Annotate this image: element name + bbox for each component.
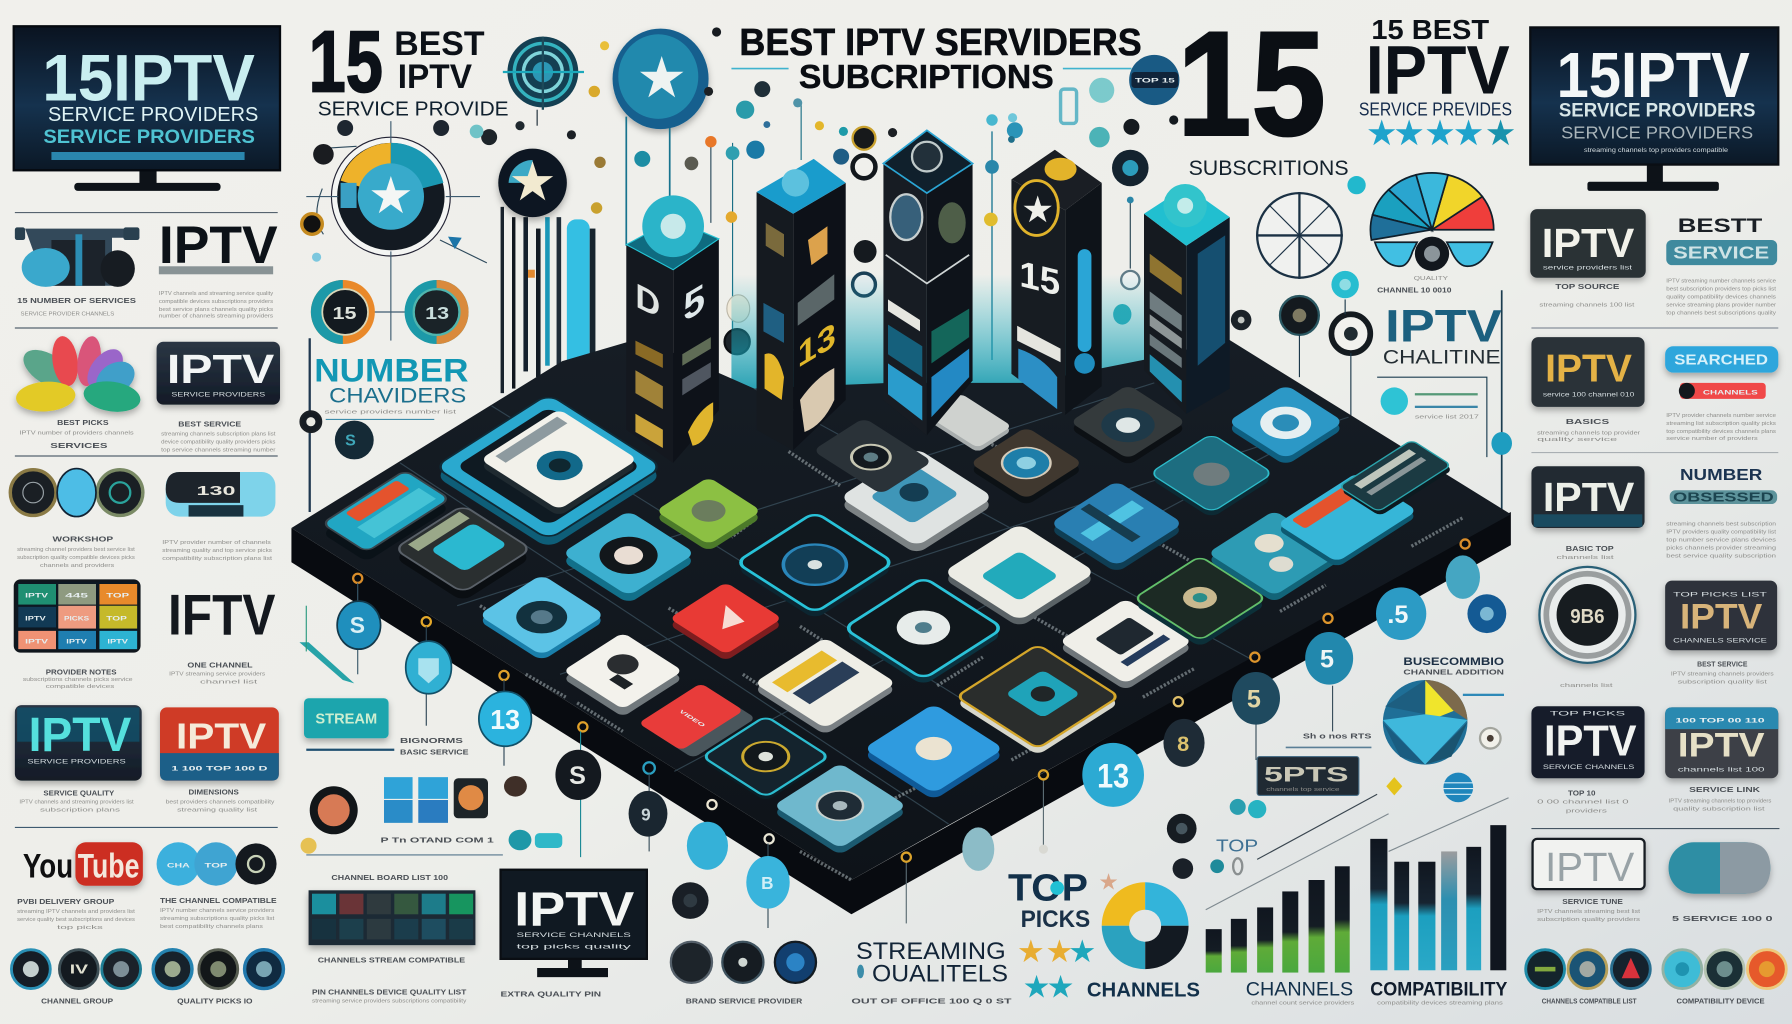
tile: white with teal (938, 523, 1101, 628)
pin: cyan oval two (746, 834, 790, 928)
pin: pale under board (902, 770, 1048, 923)
heading: 15 best IPTV right with stars: SERVICE PREVIDES (1359, 98, 1512, 119)
pin: 13: 13 (490, 704, 520, 735)
right row 3: IPTV badge and number: NUMBER (1680, 467, 1763, 484)
gem chart: CHANNEL ADDITION (1403, 667, 1504, 676)
board grid lines (400, 383, 1349, 824)
tile: grey behind towers (923, 393, 1015, 452)
left row 4: colour grid and IFTV: PICKS (64, 616, 89, 623)
right row 1: IPTV badge and best pill: IPTV streaming number channels service (1666, 278, 1776, 284)
left row 6: YouTube logo and blue circles: You (23, 848, 73, 886)
heading: 15 best IPTV service provide: 15 (309, 13, 383, 110)
right row 4: medal and gold badge: TOP PICKS LIST (1673, 592, 1768, 599)
right row 1: IPTV badge and best pill: IPTV (1542, 220, 1635, 266)
board surface (291, 338, 1511, 880)
pin: 13 right: 13 (1097, 757, 1129, 795)
bottom left dashboard: teal box and small tiles: STREAM (315, 711, 377, 727)
left row 7: six round icons: IV (70, 963, 89, 977)
tile: saturated blue (858, 704, 1009, 800)
right row 3: IPTV badge and number: picks channels provider streaming (1666, 546, 1776, 552)
left row 1: camera icon and IPTV (15, 213, 278, 320)
right row 4: medal and gold badge: IPTV streaming channels providers (1671, 671, 1774, 677)
left row 2: petal logo and IPTV badge: IPTV (167, 346, 275, 392)
left row 6: YouTube logo and blue circles: streaming IPTV channels and providers list (17, 909, 135, 915)
left row 4: colour grid and IFTV: IPTV (25, 638, 49, 645)
right row 1: IPTV badge and best pill: service providers list (1543, 265, 1632, 272)
right row 2: gold IPTV badge and pills: SEARCHED (1674, 353, 1768, 369)
SPTS panel (1257, 757, 1359, 795)
pin: cyan oval one (687, 800, 728, 870)
pin: S left: S (350, 612, 365, 638)
chart labels (1246, 978, 1507, 1007)
left row 4: colour grid and IFTV: subscriptions channels picks service (23, 677, 133, 683)
tower four: 15 (1019, 252, 1060, 304)
right row 4: medal and gold badge (1539, 567, 1777, 689)
heading: 15 best IPTV right with stars: IPTV (1366, 32, 1510, 109)
right icons cluster: CHANNEL 10 0010 (1377, 286, 1451, 295)
icon: two numbered circles: 13 (425, 303, 449, 323)
right row 2: gold IPTV badge and pills: CHANNELS (1703, 389, 1758, 396)
right row 2: gold IPTV badge and pills: service 100 channel 010 (1543, 392, 1635, 399)
left row 5: cyan and red IPTV badges: IPTV (29, 709, 131, 762)
left row 5: cyan and red IPTV badges: subscription plans (40, 807, 120, 813)
pin: 5 dark: 5 (1247, 685, 1261, 713)
blue bar chart (1370, 825, 1506, 970)
channel grid panel: CHANNEL BOARD LIST 100 (331, 873, 448, 882)
main title: BEST IPTV SERVIDERS (739, 21, 1142, 63)
tv: 15 IPTV right: 15IPTV (1557, 39, 1750, 111)
tv: 15 IPTV right: SERVICE PROVIDERS (1561, 122, 1753, 142)
right row 3: IPTV badge and number (1531, 466, 1777, 561)
pin: 8 dark (1163, 697, 1205, 767)
left row 6: YouTube logo and blue circles: best compatibility channels plans (160, 924, 263, 930)
tile: dark panel left (387, 505, 538, 602)
icon: two numbered circles (311, 280, 469, 344)
right row 3: IPTV badge and number: streaming channels best subscription (1666, 522, 1776, 528)
right row 5: two IPTV badges (1531, 706, 1779, 829)
tile: bright blue with red (1273, 472, 1422, 568)
left row 2: petal logo and IPTV badge (15, 328, 280, 453)
left row 4: colour grid and IFTV: ONE CHANNEL (187, 660, 253, 669)
tile: dark white circle (839, 577, 1008, 686)
left row 4: colour grid and IFTV: IPTV (107, 638, 129, 645)
tile: red small label: VIDEO (677, 709, 707, 729)
scattered icons around towers (470, 27, 1178, 360)
right row 2: gold IPTV badge and pills: IPTV provider channels number service (1666, 413, 1776, 419)
left row 1: camera icon and IPTV: number of channels streaming providers (159, 314, 273, 320)
pin: 13 right (1082, 743, 1144, 807)
left row 2: petal logo and IPTV badge: streaming channels subscription plans list (161, 431, 276, 437)
icon: node and small dark circle (301, 338, 374, 512)
pin: shield (406, 617, 451, 726)
heading: streaming qualitels: OUALITELS (872, 961, 1008, 988)
left row 3: circles and device: channels and providers (40, 563, 114, 569)
tile: dark brown circle (965, 427, 1088, 506)
tile: red label (314, 470, 457, 562)
channel grid panel (309, 873, 475, 1004)
pin: S left (299, 574, 381, 683)
pin: 5 dark (1232, 653, 1280, 760)
pin: S dark: S (569, 762, 586, 790)
left row 3: circles and device (10, 456, 278, 569)
tile: pale blue (474, 574, 609, 661)
tile: dark pale circle (1065, 385, 1191, 466)
right row 2: gold IPTV badge and pills (1531, 337, 1778, 453)
left row 1: camera icon and IPTV: IPTV channels and streaming service quality (159, 291, 273, 297)
left row 5: cyan and red IPTV badges: streaming quality list (177, 807, 258, 813)
right row 7: six round icons (1526, 950, 1786, 1005)
right row 7: six round icons: COMPATIBILITY DEVICE (1677, 996, 1765, 1005)
heading: top picks with stars (1008, 867, 1117, 998)
heading: IPTV chalitine: service list 2017 (1415, 414, 1479, 420)
tile: dark lime rim (1129, 556, 1271, 647)
left row 5: cyan and red IPTV badges: IPTV channels and streaming providers list (19, 799, 134, 805)
left row 6: YouTube logo and blue circles: CHA (167, 862, 191, 869)
right row 5: two IPTV badges: IPTV streaming channels top providers (1669, 798, 1772, 804)
right row 3: IPTV badge and number: channels list (1557, 555, 1614, 561)
right row 5: two IPTV badges: channels list 100 (1678, 766, 1765, 773)
tile: teal pale circles (1202, 510, 1346, 603)
right row 1: IPTV badge and best pill: service streaming plans provider number (1666, 302, 1776, 308)
big number 15: 15 (1177, 2, 1326, 167)
heading: number chavidebs: service providers number list (325, 410, 457, 416)
icon: wheel (1257, 192, 1343, 279)
tile: red chevron (664, 582, 787, 661)
right row 2: gold IPTV badge and pills: quality service (1537, 437, 1617, 443)
left row 2: petal logo and IPTV badge: BEST PICKS (57, 418, 109, 427)
heading: streaming qualitels: OUT OF OFFICE 100 Q 0 ST (851, 996, 1012, 1005)
left row 5: cyan and red IPTV badges: IPTV (176, 716, 267, 757)
left row 5: cyan and red IPTV badges: SERVICE PROVIDERS (27, 758, 126, 765)
left row 6: YouTube logo and blue circles: IPTV number channels service providers (160, 908, 274, 914)
right row 5: two IPTV badges: 0 00 channel list 0 (1537, 799, 1629, 805)
right row 4: medal and gold badge: IPTV (1680, 597, 1763, 637)
left row 3: circles and device: IPTV provider number of channels (162, 540, 271, 546)
left row 5: cyan and red IPTV badges: SERVICE QUALITY (43, 788, 114, 797)
SPTS panel: 5PTS (1264, 762, 1349, 787)
left row 3: circles and device: WORKSHOP (53, 535, 113, 544)
label: channels: CHANNELS (1087, 979, 1200, 1002)
main title: SUBCRIPTIONS (799, 59, 1054, 96)
green bar chart (1206, 866, 1350, 973)
tv: IPTV bottom: IPTV (514, 884, 634, 937)
tile: blue teal (1045, 481, 1189, 573)
left row 6: YouTube logo and blue circles: TOP (205, 862, 227, 869)
heading: number chavidebs: NUMBER (314, 353, 469, 389)
heading: number chavidebs: CHAVIDERS (329, 382, 466, 407)
left row 5: cyan and red IPTV badges (15, 705, 279, 813)
tile: white grey (833, 448, 1000, 554)
left row 4: colour grid and IFTV: compatible devices (46, 684, 114, 690)
left row 4: colour grid and IFTV: channel list (200, 679, 258, 685)
tower two: 13 (798, 314, 836, 375)
isometric board (291, 338, 1511, 914)
right row 5: two IPTV badges: TOP PICKS (1550, 710, 1626, 717)
right row 1: IPTV badge and best pill: TOP SOURCE (1555, 282, 1620, 291)
left row 2: petal logo and IPTV badge: IPTV number of providers channels (19, 430, 134, 436)
left row 4: colour grid and IFTV: TOP (106, 616, 127, 623)
chart labels: channel count service providers (1251, 1001, 1354, 1007)
right icons cluster (1231, 176, 1451, 423)
heading: streaming qualitels (851, 938, 1012, 1005)
tower one (626, 195, 719, 463)
tile: bright blue ring (1222, 384, 1349, 466)
left row 4: colour grid and IFTV: IPTV (25, 616, 47, 623)
right row 5: two IPTV badges: TOP 10 (1568, 788, 1595, 797)
right row 2: gold IPTV badge and pills: IPTV (1545, 348, 1632, 391)
pin: 5 blue: 5 (1320, 645, 1334, 673)
right row 4: medal and gold badge: subscription quality list (1678, 679, 1767, 685)
icon: dark badge: TOP 15 (1135, 77, 1176, 84)
bottom left dashboard: teal box and small tiles: BASIC SERVICE (400, 747, 469, 756)
tile: dark central strip (813, 418, 933, 494)
left row 4: colour grid and IFTV: PROVIDER NOTES (46, 667, 117, 676)
gem chart (1286, 656, 1504, 802)
left row 5: cyan and red IPTV badges: DIMENSIONS (189, 787, 239, 796)
right row 6: white IPTV and capsule: SERVICE TUNE (1562, 897, 1623, 906)
tile: blue with face (556, 510, 701, 604)
pin: dark oval (629, 762, 667, 851)
right row 3: IPTV badge and number: IPTV providers quality compatibility list (1666, 530, 1776, 536)
pin: 8 dark: 8 (1177, 731, 1189, 756)
icon: star dial with connectors (302, 120, 487, 341)
right row 1: IPTV badge and best pill: streaming channels 100 list (1539, 302, 1635, 308)
tv: 15 IPTV left (14, 26, 280, 191)
heading: number chavidebs (314, 353, 469, 419)
left row 7: six round icons: QUALITY PICKS IO (177, 996, 253, 1005)
left row 5: cyan and red IPTV badges: best providers channels compatibility (166, 799, 274, 805)
left row 4: colour grid and IFTV: IPTV (25, 593, 49, 600)
pin: .5 blue (1376, 587, 1426, 640)
left row 6: YouTube logo and blue circles: PVBI DELIVERY GROUP (17, 897, 114, 906)
main title (731, 21, 1142, 96)
right row 5: two IPTV badges: SERVICE CHANNELS (1543, 764, 1635, 771)
heading: 15 best IPTV service provide: BEST (394, 25, 485, 63)
left row 1: camera icon and IPTV: compatible devices subscriptions providers (159, 299, 273, 305)
tile: white with yellow (749, 637, 901, 735)
icon: dark badge (1129, 55, 1179, 105)
tv: 15 IPTV right (1530, 27, 1778, 191)
bottom icons row center: BRAND SERVICE PROVIDER (686, 996, 803, 1005)
heading: streaming qualitels: STREAMING (856, 938, 1006, 965)
left row 3: circles and device: streaming channel providers best service list (17, 547, 135, 553)
right row 5: two IPTV badges: quality subscription list (1673, 806, 1765, 812)
small icons near charts: TOP (1216, 835, 1258, 855)
left row 3: circles and device: compatibility subscription plans list (162, 556, 273, 562)
left row 6: YouTube logo and blue circles: service quality best subscriptions and devices (17, 917, 135, 923)
left row 6: YouTube logo and blue circles: streaming subscriptions quality picks list (160, 916, 275, 922)
heading: IPTV chalitine (1377, 290, 1512, 512)
left row 2: petal logo and IPTV badge: top service channels streaming number (161, 447, 276, 453)
pin: dark oval: 9 (641, 805, 651, 825)
left row 4: colour grid and IFTV: IPTV streaming service providers (169, 671, 265, 677)
left row 4: colour grid and IFTV: IFTV (168, 583, 275, 647)
tile: lime green (650, 477, 767, 551)
tile: large blue frame (428, 394, 669, 549)
left row 4: colour grid and IFTV: TOP (106, 593, 129, 600)
channel grid panel: CHANNELS STREAM COMPATIBLE (318, 955, 465, 964)
left row 1: camera icon and IPTV: best service plans channels quality picks (159, 307, 273, 313)
bottom left dashboard: teal box and small tiles: P Tn OTAND COM 1 (381, 835, 494, 844)
right row 2: gold IPTV badge and pills: streaming list subscription quality picks (1666, 421, 1776, 427)
tile: white dark (1054, 598, 1198, 691)
chart labels: COMPATIBILITY (1370, 978, 1507, 1000)
left row 7: six round icons: CHANNEL GROUP (41, 996, 113, 1005)
tower one: D (635, 275, 660, 326)
left row 4: colour grid and IFTV: 445 (65, 593, 89, 600)
tv: 15 IPTV right: streaming channels top providers compatible (1584, 147, 1728, 154)
board side (291, 512, 1511, 914)
right row 1: IPTV badge and best pill: quality compatibility devices channels (1666, 294, 1776, 300)
tower one: 5 (683, 274, 705, 331)
heading: IPTV chalitine: IPTV (1385, 301, 1502, 352)
tile: gold frame (951, 644, 1124, 755)
heading: top picks with stars: TOP (1008, 867, 1088, 909)
right row 3: IPTV badge and number: BASIC TOP (1566, 544, 1614, 553)
tile: teal grey (1145, 434, 1277, 518)
pin: 13 (479, 671, 531, 766)
right row 2: gold IPTV badge and pills: streaming channels top provider (1537, 430, 1640, 436)
right row 4: medal and gold badge: BEST SERVICE (1697, 659, 1747, 668)
left row 6: YouTube logo and blue circles: THE CHANNEL COMPATIBLE (160, 896, 277, 905)
bottom left dashboard: teal box and small tiles (301, 698, 562, 855)
heading: 15 best IPTV right with stars: 15 BEST (1371, 14, 1489, 45)
chart labels: CHANNELS (1246, 978, 1353, 1000)
left row 4: colour grid and IFTV (15, 581, 275, 690)
heading: 15 best IPTV service provide: SERVICE PROVIDE (318, 97, 509, 120)
small icons near charts (1167, 794, 1509, 910)
icon: gauge fan chart (1370, 173, 1494, 271)
tile: white figure (557, 632, 689, 717)
tower five (1144, 184, 1230, 414)
right row 5: two IPTV badges: IPTV (1544, 717, 1637, 765)
tv: IPTV bottom (501, 870, 647, 999)
right row 6: white IPTV and capsule (1533, 839, 1773, 923)
stripes behind tower one (498, 149, 595, 393)
tv: IPTV bottom: EXTRA QUALITY PIN (501, 990, 601, 999)
heading: 15 best IPTV service provide (309, 13, 509, 120)
big number 15: SUBSCRITIONS (1189, 155, 1349, 180)
tile: pale teal (768, 763, 912, 855)
channel grid panel: PIN CHANNELS DEVICE QUALITY LIST (312, 987, 467, 996)
icon: node and small dark circle: S (345, 433, 356, 450)
left row 3: circles and device: subscription quality compatible devices picks (17, 555, 135, 561)
heading: 15 best IPTV right with stars (1359, 14, 1514, 145)
gem chart: BUSECOMMBIO (1403, 656, 1504, 668)
right icons cluster: QUALITY (1414, 276, 1448, 282)
tile: dark cyan rim (731, 512, 899, 620)
left row 6: YouTube logo and blue circles (15, 827, 278, 931)
bottom left dashboard: teal box and small tiles: BIGNORMS (400, 736, 463, 745)
left row 5: cyan and red IPTV badges: 1 100 TOP 100 D (171, 765, 268, 772)
icon: two numbered circles: 15 (333, 303, 357, 323)
gem chart: Sh o nos RTS (1303, 731, 1372, 740)
right row 3: IPTV badge and number: IPTV (1543, 474, 1635, 520)
tower two (757, 159, 846, 450)
tv: 15 IPTV left: 15IPTV (42, 42, 255, 116)
board printed strips (480, 423, 1463, 880)
icon: target emblem (503, 37, 584, 126)
left row 2: petal logo and IPTV badge: BEST SERVICE (178, 419, 241, 428)
left row 2: petal logo and IPTV badge: SERVICE PROVIDERS (171, 392, 266, 399)
left row 1: camera icon and IPTV: SERVICE PROVIDER CHANNELS (21, 311, 114, 317)
tv: 15 IPTV right: SERVICE PROVIDERS (1559, 100, 1755, 122)
right row 6: white IPTV and capsule: subscription quality providers (1537, 917, 1640, 923)
left row 4: colour grid and IFTV: IPTV (66, 638, 88, 645)
right row 1: IPTV badge and best pill: top channels best subscriptions quality (1666, 310, 1776, 316)
right row 5: two IPTV badges: IPTV (1678, 727, 1765, 765)
channel grid panel: streaming service providers subscriptions compatibility (312, 998, 466, 1004)
tile: dark teal rim (1336, 440, 1455, 516)
heading: top picks with stars: PICKS (1021, 906, 1090, 933)
left row 3: circles and device: streaming quality and top service picks (162, 548, 272, 554)
pin: S dark (555, 722, 601, 857)
right row 5: two IPTV badges: SERVICE LINK (1689, 785, 1761, 794)
left row 3: circles and device: 130 (197, 484, 235, 498)
tower four (1011, 150, 1102, 415)
right row 5: two IPTV badges: 100 TOP 00 110 (1675, 717, 1766, 724)
right row 1: IPTV badge and best pill (1530, 209, 1778, 328)
tile: red small label (638, 683, 756, 758)
tile: dark ring (699, 716, 833, 802)
right row 5: two IPTV badges: providers (1566, 809, 1607, 815)
right row 3: IPTV badge and number: top number service plans devices (1666, 538, 1776, 544)
right row 1: IPTV badge and best pill: best subscription providers top picks list (1666, 286, 1776, 292)
right row 3: IPTV badge and number: OBSESSED (1673, 491, 1774, 505)
right row 2: gold IPTV badge and pills: service number of providers (1666, 436, 1758, 442)
left row 2: petal logo and IPTV badge: device compatibility quality providers picks (161, 439, 276, 445)
right row 6: white IPTV and capsule: IPTV (1545, 844, 1635, 890)
right row 6: white IPTV and capsule: IPTV channels streaming best list (1537, 909, 1640, 915)
right row 1: IPTV badge and best pill: SERVICE (1673, 242, 1769, 262)
right row 2: gold IPTV badge and pills: top compatibility devices channels plans (1666, 429, 1776, 435)
left row 7: six round icons (11, 950, 283, 1005)
left row 1: camera icon and IPTV: 15 NUMBER OF SERVICES (17, 296, 136, 305)
right row 4: medal and gold badge: 9B6 (1570, 605, 1605, 628)
right row 1: IPTV badge and best pill: BESTT (1678, 215, 1762, 237)
donut chart (1102, 882, 1189, 969)
right row 4: medal and gold badge: CHANNELS SERVICE (1673, 637, 1767, 644)
left row 6: YouTube logo and blue circles: top picks (57, 925, 103, 931)
right row 6: white IPTV and capsule: 5 SERVICE 100 0 (1672, 914, 1773, 923)
heading: IPTV chalitine: CHALITINE (1383, 346, 1501, 368)
pin: cyan oval two: B (761, 873, 774, 893)
heading: 15 best IPTV service provide: IPTV (398, 58, 472, 96)
pin: 5 blue (1305, 614, 1353, 731)
right row 2: gold IPTV badge and pills: BASICS (1566, 417, 1609, 426)
chart labels: compatibility devices streaming plans (1377, 1001, 1503, 1007)
pin: .5 blue: .5 (1387, 601, 1408, 629)
right row 7: six round icons: CHANNELS COMPATIBLE LIST (1542, 996, 1637, 1005)
right row 4: medal and gold badge: channels list (1560, 683, 1613, 689)
left row 2: petal logo and IPTV badge: SERVICES (50, 441, 108, 450)
bottom icons row center (671, 882, 816, 1005)
tv: 15 IPTV left: SERVICE PROVIDERS (43, 126, 255, 148)
left row 1: camera icon and IPTV: IPTV (159, 216, 278, 275)
tv: 15 IPTV left: SERVICE PROVIDERS (48, 103, 258, 126)
tile: white document (475, 409, 643, 516)
teal haze behind towers (731, 274, 1154, 389)
SPTS panel: channels top service (1266, 787, 1339, 793)
right row 3: IPTV badge and number: best service quality subscription (1666, 554, 1776, 560)
pin: upper right (1446, 539, 1506, 633)
tv: IPTV bottom: top picks quality (517, 944, 632, 951)
tv: IPTV bottom: SERVICE CHANNELS (517, 932, 632, 939)
tower three (883, 130, 973, 435)
left row 6: YouTube logo and blue circles: Tube (78, 848, 139, 886)
icon: blue star ball (613, 29, 709, 246)
